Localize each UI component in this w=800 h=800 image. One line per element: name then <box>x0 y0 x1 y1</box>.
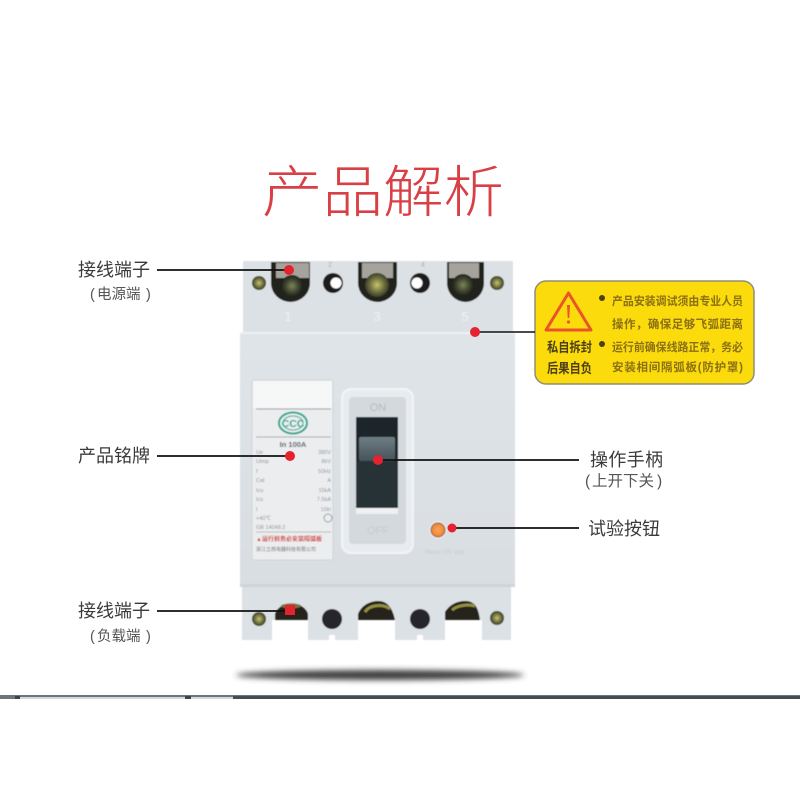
lower tab slots <box>329 635 423 640</box>
test button: Reset ON stop <box>425 550 465 556</box>
lower mounting screw right <box>490 611 504 625</box>
spec left column <box>256 450 285 531</box>
terminal numbers: 3 <box>373 309 381 324</box>
bullet dots <box>599 295 605 301</box>
terminal 1 <box>271 262 310 302</box>
upper pole marks: 4 <box>421 262 425 269</box>
callout: top terminal: ) <box>146 287 151 303</box>
spec left column: Cat <box>256 478 265 484</box>
bottom bar <box>0 695 800 699</box>
spec left column: +40℃ <box>256 515 271 522</box>
mounting screw right <box>490 276 504 290</box>
nameplate warning: ▲运行前务必安装隔弧板 <box>256 535 322 543</box>
CCC logo <box>279 412 307 434</box>
spec left column: Ics <box>256 497 263 503</box>
through hole right <box>410 273 430 293</box>
callout: top terminal <box>78 260 294 303</box>
handle frame <box>342 389 413 553</box>
spec left column: t <box>256 507 258 513</box>
callout: nameplate <box>78 446 295 466</box>
through hole left <box>323 273 343 293</box>
warning triangle icon <box>546 293 591 330</box>
callout: top terminal: 电源端 <box>97 286 140 303</box>
terminal numbers: 5 <box>461 309 469 324</box>
circuit breaker <box>240 261 515 640</box>
warning text: 产品安装调试须由专业人员 <box>612 294 743 308</box>
nameplate <box>252 380 333 560</box>
warning caption: 后果自负 <box>547 360 592 376</box>
bottom terminal block <box>242 585 511 640</box>
warning text: 运行前确保线路正常，务必 <box>612 340 743 354</box>
spec right column: 380V <box>318 450 331 456</box>
warning text: 安装相间隔弧板(防护罩) <box>612 360 743 374</box>
callout: nameplate: 产品铭牌 <box>78 446 150 466</box>
lower mounting screw left <box>252 612 266 626</box>
callout: operating handle <box>373 450 663 490</box>
callout: operating handle: ( <box>585 473 591 490</box>
terminal 3 <box>358 262 397 302</box>
callout: bottom terminal: ( <box>90 629 95 645</box>
callout: test button: 试验按钮 <box>588 519 660 539</box>
OFF label: OFF <box>367 525 389 537</box>
warning text <box>612 294 743 374</box>
handle <box>356 417 398 508</box>
lower terminal 3 <box>358 601 395 620</box>
callout: top terminal: ( <box>90 287 95 303</box>
ground shadow <box>236 670 524 680</box>
spec left column: Icu <box>256 488 263 494</box>
callout: top terminal: 接线端子 <box>78 260 150 280</box>
spec left column: GB 14048.2 <box>256 525 285 531</box>
callout: operating handle: 操作手柄 <box>590 450 663 470</box>
top terminal block <box>243 261 513 336</box>
warning caption: 私自拆封 <box>547 339 592 355</box>
warning text: 操作，确保足够飞弧距离 <box>612 317 743 331</box>
callout: operating handle: ) <box>657 473 662 490</box>
spec right column: A <box>327 478 331 484</box>
upper pole marks: 2 <box>328 262 332 269</box>
callout: warning label <box>470 327 535 337</box>
CCC logo: CCC <box>282 418 305 430</box>
callout: bottom terminal <box>78 601 295 645</box>
callout: bottom terminal: 接线端子 <box>78 601 150 621</box>
spec right column <box>317 450 331 513</box>
spec left column: f <box>256 469 258 475</box>
title: 产品解析 <box>262 148 504 229</box>
manufacturer: 浙江立西电器科技有限公司 <box>256 546 316 553</box>
terminal 5 <box>447 262 484 302</box>
rating: In 100A <box>280 440 307 449</box>
spec right column: 8kV <box>322 459 331 465</box>
upper pole marks <box>328 262 425 269</box>
callout: operating handle: 上开下关 <box>592 472 654 490</box>
spec left column: Uimp <box>256 459 269 465</box>
test button <box>425 521 465 556</box>
lower terminal 1 <box>275 603 308 620</box>
spec right column: 50Hz <box>318 469 331 475</box>
warning caption <box>547 339 592 376</box>
ON label: ON <box>370 402 386 414</box>
spec left column: Ue <box>256 450 263 456</box>
mounting screw left <box>252 276 266 290</box>
spec right column: 7.5kA <box>317 497 331 503</box>
main body <box>240 332 515 587</box>
lower hole right <box>410 609 430 629</box>
terminal numbers <box>284 309 469 324</box>
lower terminal 5 <box>445 601 480 620</box>
callout: bottom terminal: 负载端 <box>97 628 140 645</box>
terminal numbers: 1 <box>284 309 292 324</box>
callout: bottom terminal: ) <box>146 629 151 645</box>
lower hole left <box>322 609 342 629</box>
callout: test button <box>448 519 660 539</box>
warning label <box>535 281 754 384</box>
spec right column: 10in <box>321 507 331 513</box>
spec right column: 15kA <box>318 488 331 494</box>
